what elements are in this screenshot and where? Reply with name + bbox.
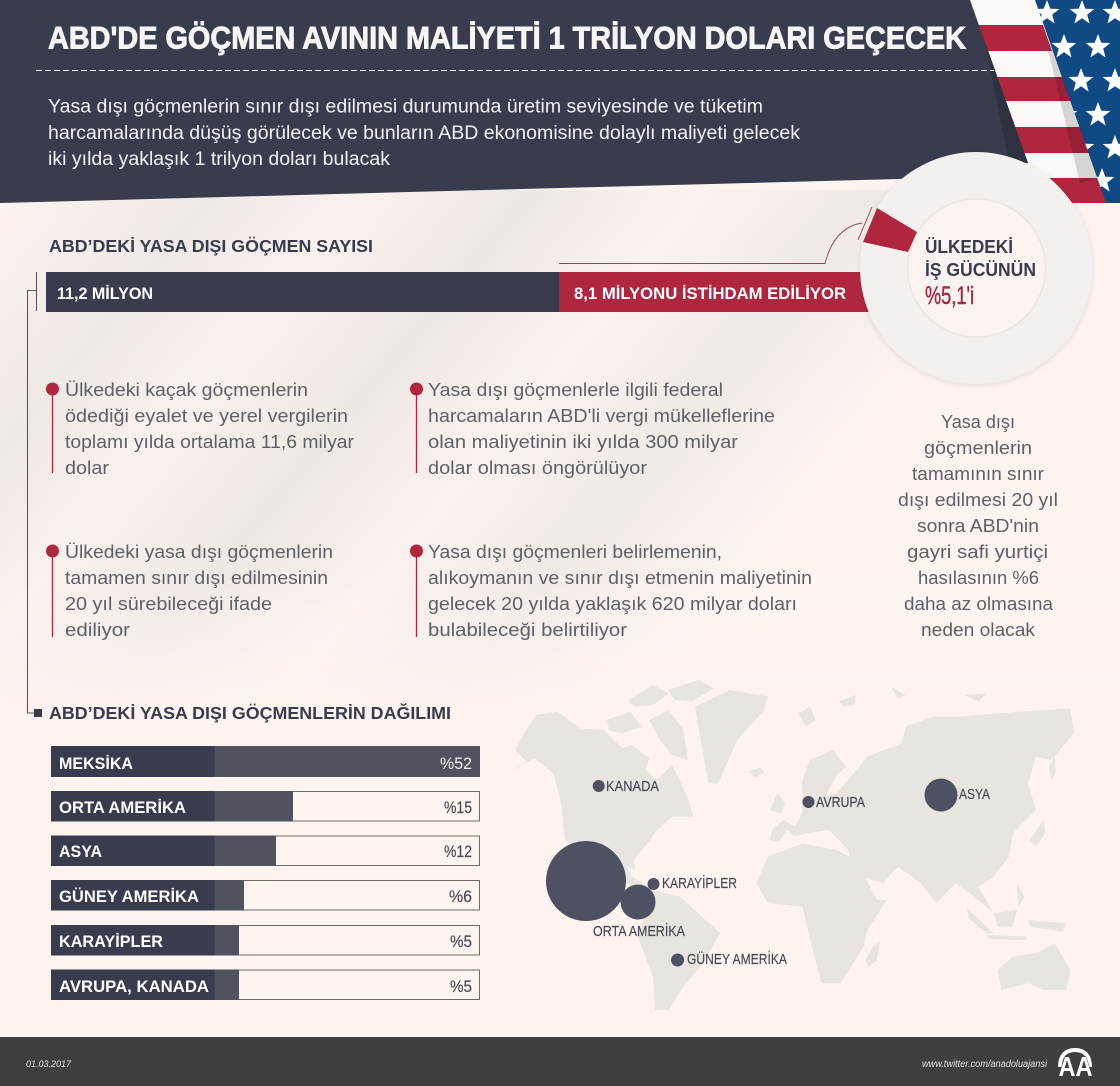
- bubble: Güney Amerika: [671, 954, 684, 966]
- side note: GDP effect: göçmenlerin: [924, 438, 1032, 458]
- bullet: federal spending: harcamaların ABD'li vergi mükelleflerine: [428, 406, 775, 426]
- map labels: KANADA: [606, 779, 659, 795]
- stat bar: 8,1 MİLYONU İSTİHDAM EDİLİYOR: [574, 284, 846, 303]
- bubble: Orta Amerika: [620, 884, 656, 920]
- bullet: federal spending: olan maliyetinin iki yılda 300 milyar: [428, 432, 738, 452]
- bullet: deportation cost: Yasa dışı göçmenleri belirlemenin,: [428, 542, 722, 562]
- bar: Meksika: %52: [440, 754, 472, 773]
- bar: Güney Amerika: GÜNEY AMERİKA: [59, 887, 199, 906]
- bubble: Meksika: [546, 841, 626, 921]
- bubble: Karayipler: [648, 878, 660, 890]
- bar: Orta Amerika: ORTA AMERİKA: [59, 798, 186, 817]
- bar: Avrupa, Kanada: AVRUPA, KANADA: [59, 977, 209, 996]
- bar: Asya: %12: [444, 842, 472, 861]
- stat bar: [46, 272, 879, 312]
- bullet: federal spending: Yasa dışı göçmenlerle ilgili federal: [428, 380, 723, 400]
- bullet: deportation cost: alıkoymanın ve sınır dışı etmenin maliyetinin: [428, 568, 812, 588]
- bullet: federal spending: [410, 380, 775, 478]
- donut chart: share of workforce: ÜLKEDEKİ: [925, 237, 1013, 257]
- side note: GDP effect: hasılasının %6: [918, 568, 1039, 588]
- bullet: taxes: ödediği eyalet ve yerel vergilerin: [65, 406, 348, 426]
- intro text: [48, 96, 801, 170]
- connector line to donut: [559, 223, 862, 264]
- intro text: Yasa dışı göçmenlerin sınır dışı edilmesi durumunda üretim seviyesinde ve tüketim: [48, 96, 763, 118]
- footer: [0, 1037, 1120, 1086]
- heading: number of illegal immigrants: ABD’DEKİ YASA DIŞI GÖÇMEN SAYISI: [49, 236, 373, 256]
- bullet: deportation cost: [410, 542, 812, 640]
- bullet: deportation time: tamamen sınır dışı edilmesinin: [65, 568, 328, 588]
- bar: Güney Amerika: [51, 880, 480, 910]
- side note: GDP effect: daha az olmasına: [904, 594, 1054, 614]
- map labels: GÜNEY AMERİKA: [687, 950, 787, 968]
- header band: [0, 0, 1028, 203]
- side note: GDP effect: [898, 412, 1058, 640]
- bracket connector: [28, 272, 36, 713]
- bar: Asya: [51, 836, 480, 866]
- US flag: [968, 0, 1120, 203]
- bar: Güney Amerika: %6: [449, 887, 472, 906]
- map labels: ORTA AMERİKA: [593, 922, 685, 940]
- heading: distribution: ABD’DEKİ YASA DIŞI GÖÇMENLERİN DAĞILIMI: [49, 702, 451, 723]
- bar: Meksika: MEKSİKA: [59, 754, 133, 773]
- intro text: harcamalarında düşüş görülecek ve bunların ABD ekonomisine dolaylı maliyeti gelecek: [48, 123, 801, 144]
- bullet: deportation cost: gelecek 20 yılda yaklaşık 620 milyar doları: [428, 594, 797, 614]
- side note: GDP effect: gayri safi yurtiçi: [907, 542, 1048, 562]
- intro text: iki yılda yaklaşık 1 trilyon doları bulacak: [48, 149, 391, 170]
- bar: Orta Amerika: [51, 791, 480, 822]
- bullet: deportation time: [46, 542, 333, 640]
- side note: GDP effect: neden olacak: [921, 620, 1036, 640]
- side note: GDP effect: tamamının sınır: [912, 464, 1044, 484]
- bar: Avrupa, Kanada: %5: [450, 977, 472, 996]
- donut chart: share of workforce: İŞ GÜCÜNÜN: [925, 260, 1036, 280]
- bar: Karayipler: %5: [450, 932, 472, 951]
- map labels: ASYA: [959, 787, 990, 803]
- bar: Avrupa, Kanada: [51, 970, 480, 1000]
- stat bar: 11,2 MİLYON: [57, 284, 153, 303]
- bubble: Kanada: [593, 780, 605, 792]
- map labels: KARAYİPLER: [662, 874, 737, 892]
- bullet: deportation time: Ülkedeki yasa dışı göçmenlerin: [65, 542, 333, 562]
- bullet: deportation time: ediliyor: [65, 620, 130, 640]
- bullet: taxes: toplamı yılda ortalama 11,6 milyar: [65, 432, 354, 452]
- donut chart: share of workforce: [858, 152, 1092, 384]
- side note: GDP effect: Yasa dışı: [941, 412, 1015, 432]
- bar: Orta Amerika: %15: [444, 798, 472, 817]
- bar: Asya: ASYA: [59, 842, 102, 861]
- bar chart: distribution: [51, 746, 480, 1000]
- bullet: deportation cost: bulabileceği belirtiliyor: [428, 620, 627, 640]
- map labels: AVRUPA: [816, 795, 865, 811]
- world map: [500, 680, 1074, 1010]
- bar: Karayipler: KARAYİPLER: [59, 932, 163, 951]
- bubble: Avrupa: [802, 796, 814, 808]
- side note: GDP effect: dışı edilmesi 20 yıl: [898, 490, 1058, 510]
- bullet: deportation time: 20 yıl sürebileceği ifade: [65, 594, 272, 614]
- bar: Meksika: [51, 746, 480, 777]
- map labels: [593, 779, 990, 968]
- side note: GDP effect: sonra ABD'nin: [917, 516, 1039, 536]
- title: ABD'DE GÖÇMEN AVININ MALİYETİ 1 TRİLYON DOLARI GEÇECEK: [48, 20, 966, 56]
- donut chart: share of workforce: %5,1'i: [925, 282, 974, 310]
- map bubbles: [546, 778, 958, 966]
- bubble: Asya: [924, 778, 958, 812]
- twitter link: www.twitter.com/anadoluajansi: [922, 1059, 1048, 1070]
- bullet: taxes: dolar: [65, 458, 109, 478]
- date: 01.03.2017: [26, 1059, 72, 1069]
- bullet: taxes: Ülkedeki kaçak göçmenlerin: [65, 380, 308, 400]
- bar: Karayipler: [51, 925, 480, 956]
- background: [0, 190, 890, 637]
- logo: AA: AA: [1058, 1051, 1092, 1082]
- bullet: federal spending: dolar olması öngörülüyor: [428, 458, 647, 478]
- bullet: taxes: [46, 380, 354, 478]
